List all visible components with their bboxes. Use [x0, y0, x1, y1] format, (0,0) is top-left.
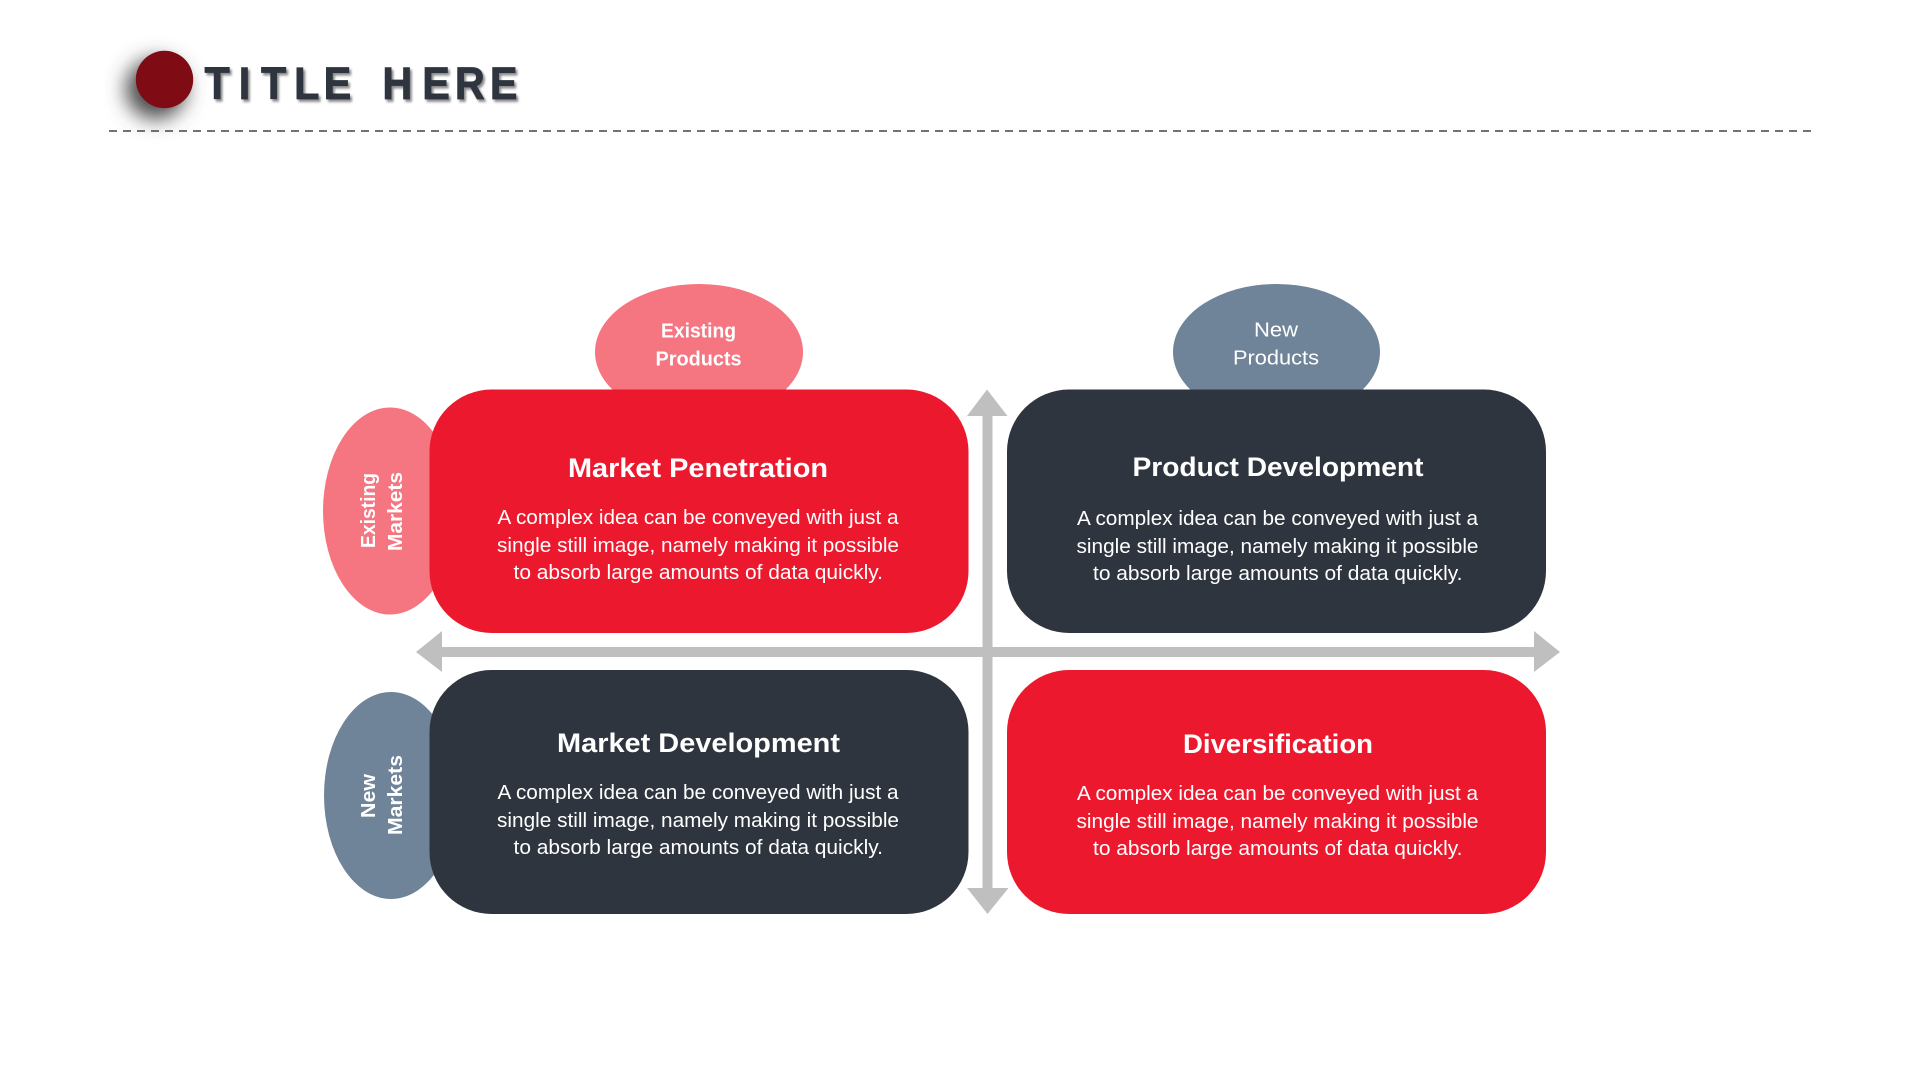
label: new markets: Markets [385, 755, 407, 835]
label: existing products: Products [656, 348, 742, 370]
text: product development body: single still image, namely making it possible [1076, 536, 1478, 558]
heading: diversification: Diversification [1183, 729, 1373, 759]
text: market penetration body: to absorb large amounts of data quickly. [514, 562, 883, 584]
label: existing products [595, 284, 803, 420]
label: existing markets [323, 408, 457, 614]
text: diversification body: to absorb large amounts of data quickly. [1093, 838, 1462, 860]
label: new products: Products [1233, 348, 1319, 370]
icon: title circle [126, 51, 193, 119]
text: diversification body: single still image, namely making it possible [1076, 811, 1478, 833]
text: product development body: A complex idea can be conveyed with just a [1077, 508, 1479, 530]
panel: market penetration [430, 390, 968, 633]
arrow: horizontal axis [416, 631, 1560, 672]
panel: product development [1007, 390, 1546, 633]
label: new products [1173, 284, 1380, 420]
text: diversification body [1076, 783, 1479, 860]
heading: market penetration: Market Penetration [568, 453, 828, 483]
label: existing markets: Existing [358, 473, 380, 548]
heading: market development: Market Development [557, 728, 840, 758]
text: market penetration body [497, 507, 899, 584]
text: market development body [497, 782, 899, 859]
text: market development body: A complex idea can be conveyed with just a [498, 782, 899, 804]
label: existing products: Existing [661, 320, 736, 342]
heading: product development: Product Development [1132, 452, 1424, 482]
label: new products: New [1254, 320, 1299, 342]
title: TITLEHERE [207, 62, 520, 112]
text: market development body: to absorb large amounts of data quickly. [514, 837, 883, 859]
text: market penetration body: A complex idea can be conveyed with just a [498, 507, 899, 529]
text: product development body [1076, 508, 1479, 585]
panel: market development [430, 670, 968, 914]
text: market development body: single still image, namely making it possible [497, 810, 899, 832]
label: existing markets: Markets [385, 472, 407, 551]
text: market penetration body: single still image, namely making it possible [497, 535, 899, 557]
text: product development body: to absorb large amounts of data quickly. [1093, 563, 1462, 585]
title block [126, 51, 520, 119]
text: diversification body: A complex idea can be conveyed with just a [1077, 783, 1479, 805]
label: new markets: New [358, 774, 380, 818]
arrow: vertical axis [967, 390, 1008, 914]
title: TITLEHERE [205, 59, 518, 109]
label: new markets [324, 692, 458, 899]
panel: diversification [1007, 670, 1546, 914]
